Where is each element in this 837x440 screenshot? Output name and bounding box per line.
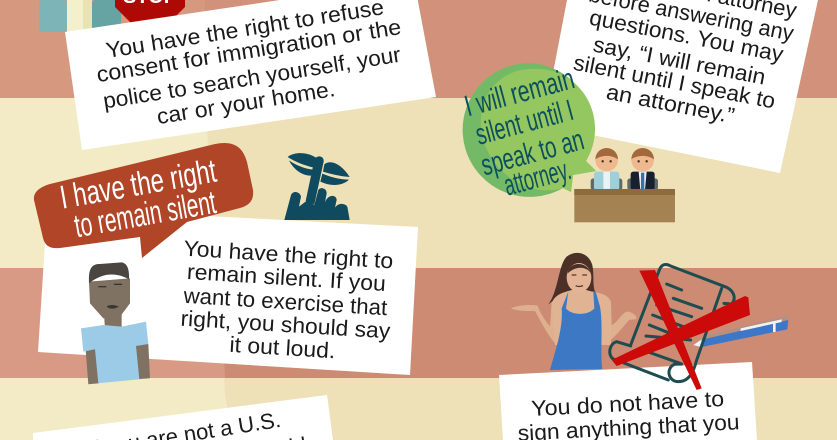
panel: right to remain silent: right, you should say xyxy=(180,306,391,343)
speech bubble: right to remain silent: to remain silent xyxy=(71,183,219,244)
icon: scroll xyxy=(610,265,734,382)
panel: refuse consent: car or your home. xyxy=(155,76,337,129)
person: left xyxy=(591,148,622,190)
panel: right to remain silent: it out loud. xyxy=(229,332,336,363)
facial features xyxy=(572,275,587,286)
fringe xyxy=(568,264,591,273)
face xyxy=(567,263,591,292)
desk xyxy=(574,189,675,222)
speech bubble: will remain silent: attorney. xyxy=(500,153,575,203)
speech bubble: will remain silent: speak to an xyxy=(478,123,588,182)
panel: right to an attorney: an attorney.” xyxy=(604,79,737,128)
person: right xyxy=(627,148,658,190)
icon: pen xyxy=(693,315,788,347)
panel: right to remain silent: You have the right to xyxy=(183,236,394,273)
panel: right to an attorney: say, “I will remain xyxy=(591,32,768,90)
speech bubble: will remain silent: silent until I xyxy=(472,94,577,152)
panel: right to an attorney: silent until I speak to xyxy=(571,50,777,113)
speech bubble: right to remain silent: I have the right xyxy=(57,152,219,216)
left arm xyxy=(511,302,562,343)
panel: not a citizen xyxy=(33,395,333,440)
icon: finger over lips xyxy=(284,153,350,220)
panel: refuse consent xyxy=(65,0,436,150)
illustration: two people at a desk xyxy=(574,148,675,222)
panel: do not have to sign: You do not have to xyxy=(531,386,725,421)
illustration: document with pen and red cross xyxy=(610,265,788,390)
dress xyxy=(550,292,602,370)
panel: right to remain silent xyxy=(38,207,418,375)
illustration: man xyxy=(81,262,150,384)
panel: right to an attorney: questions. You may xyxy=(587,5,786,67)
panel: right to remain silent: want to exercise that xyxy=(182,283,388,320)
panel: refuse consent: consent for immigration or the xyxy=(95,14,403,87)
right arm xyxy=(600,302,637,343)
icon: gift box xyxy=(39,0,121,32)
speech bubble: will remain silent: I will remain xyxy=(461,62,578,123)
torso xyxy=(552,290,611,345)
illustration: woman shrugging xyxy=(511,253,637,370)
panel: do not have to sign xyxy=(499,362,757,440)
speech bubble: right to remain silent xyxy=(34,143,253,258)
hair xyxy=(548,253,595,304)
panel: right to remain silent: remain silent. If you xyxy=(186,259,387,296)
speech bubble: will remain silent xyxy=(461,62,596,203)
icon: stop sign xyxy=(115,0,185,25)
icon: red cross xyxy=(612,270,750,390)
panel: refuse consent: police to search yourself, your xyxy=(101,42,402,113)
panel: right to an attorney xyxy=(543,0,818,173)
